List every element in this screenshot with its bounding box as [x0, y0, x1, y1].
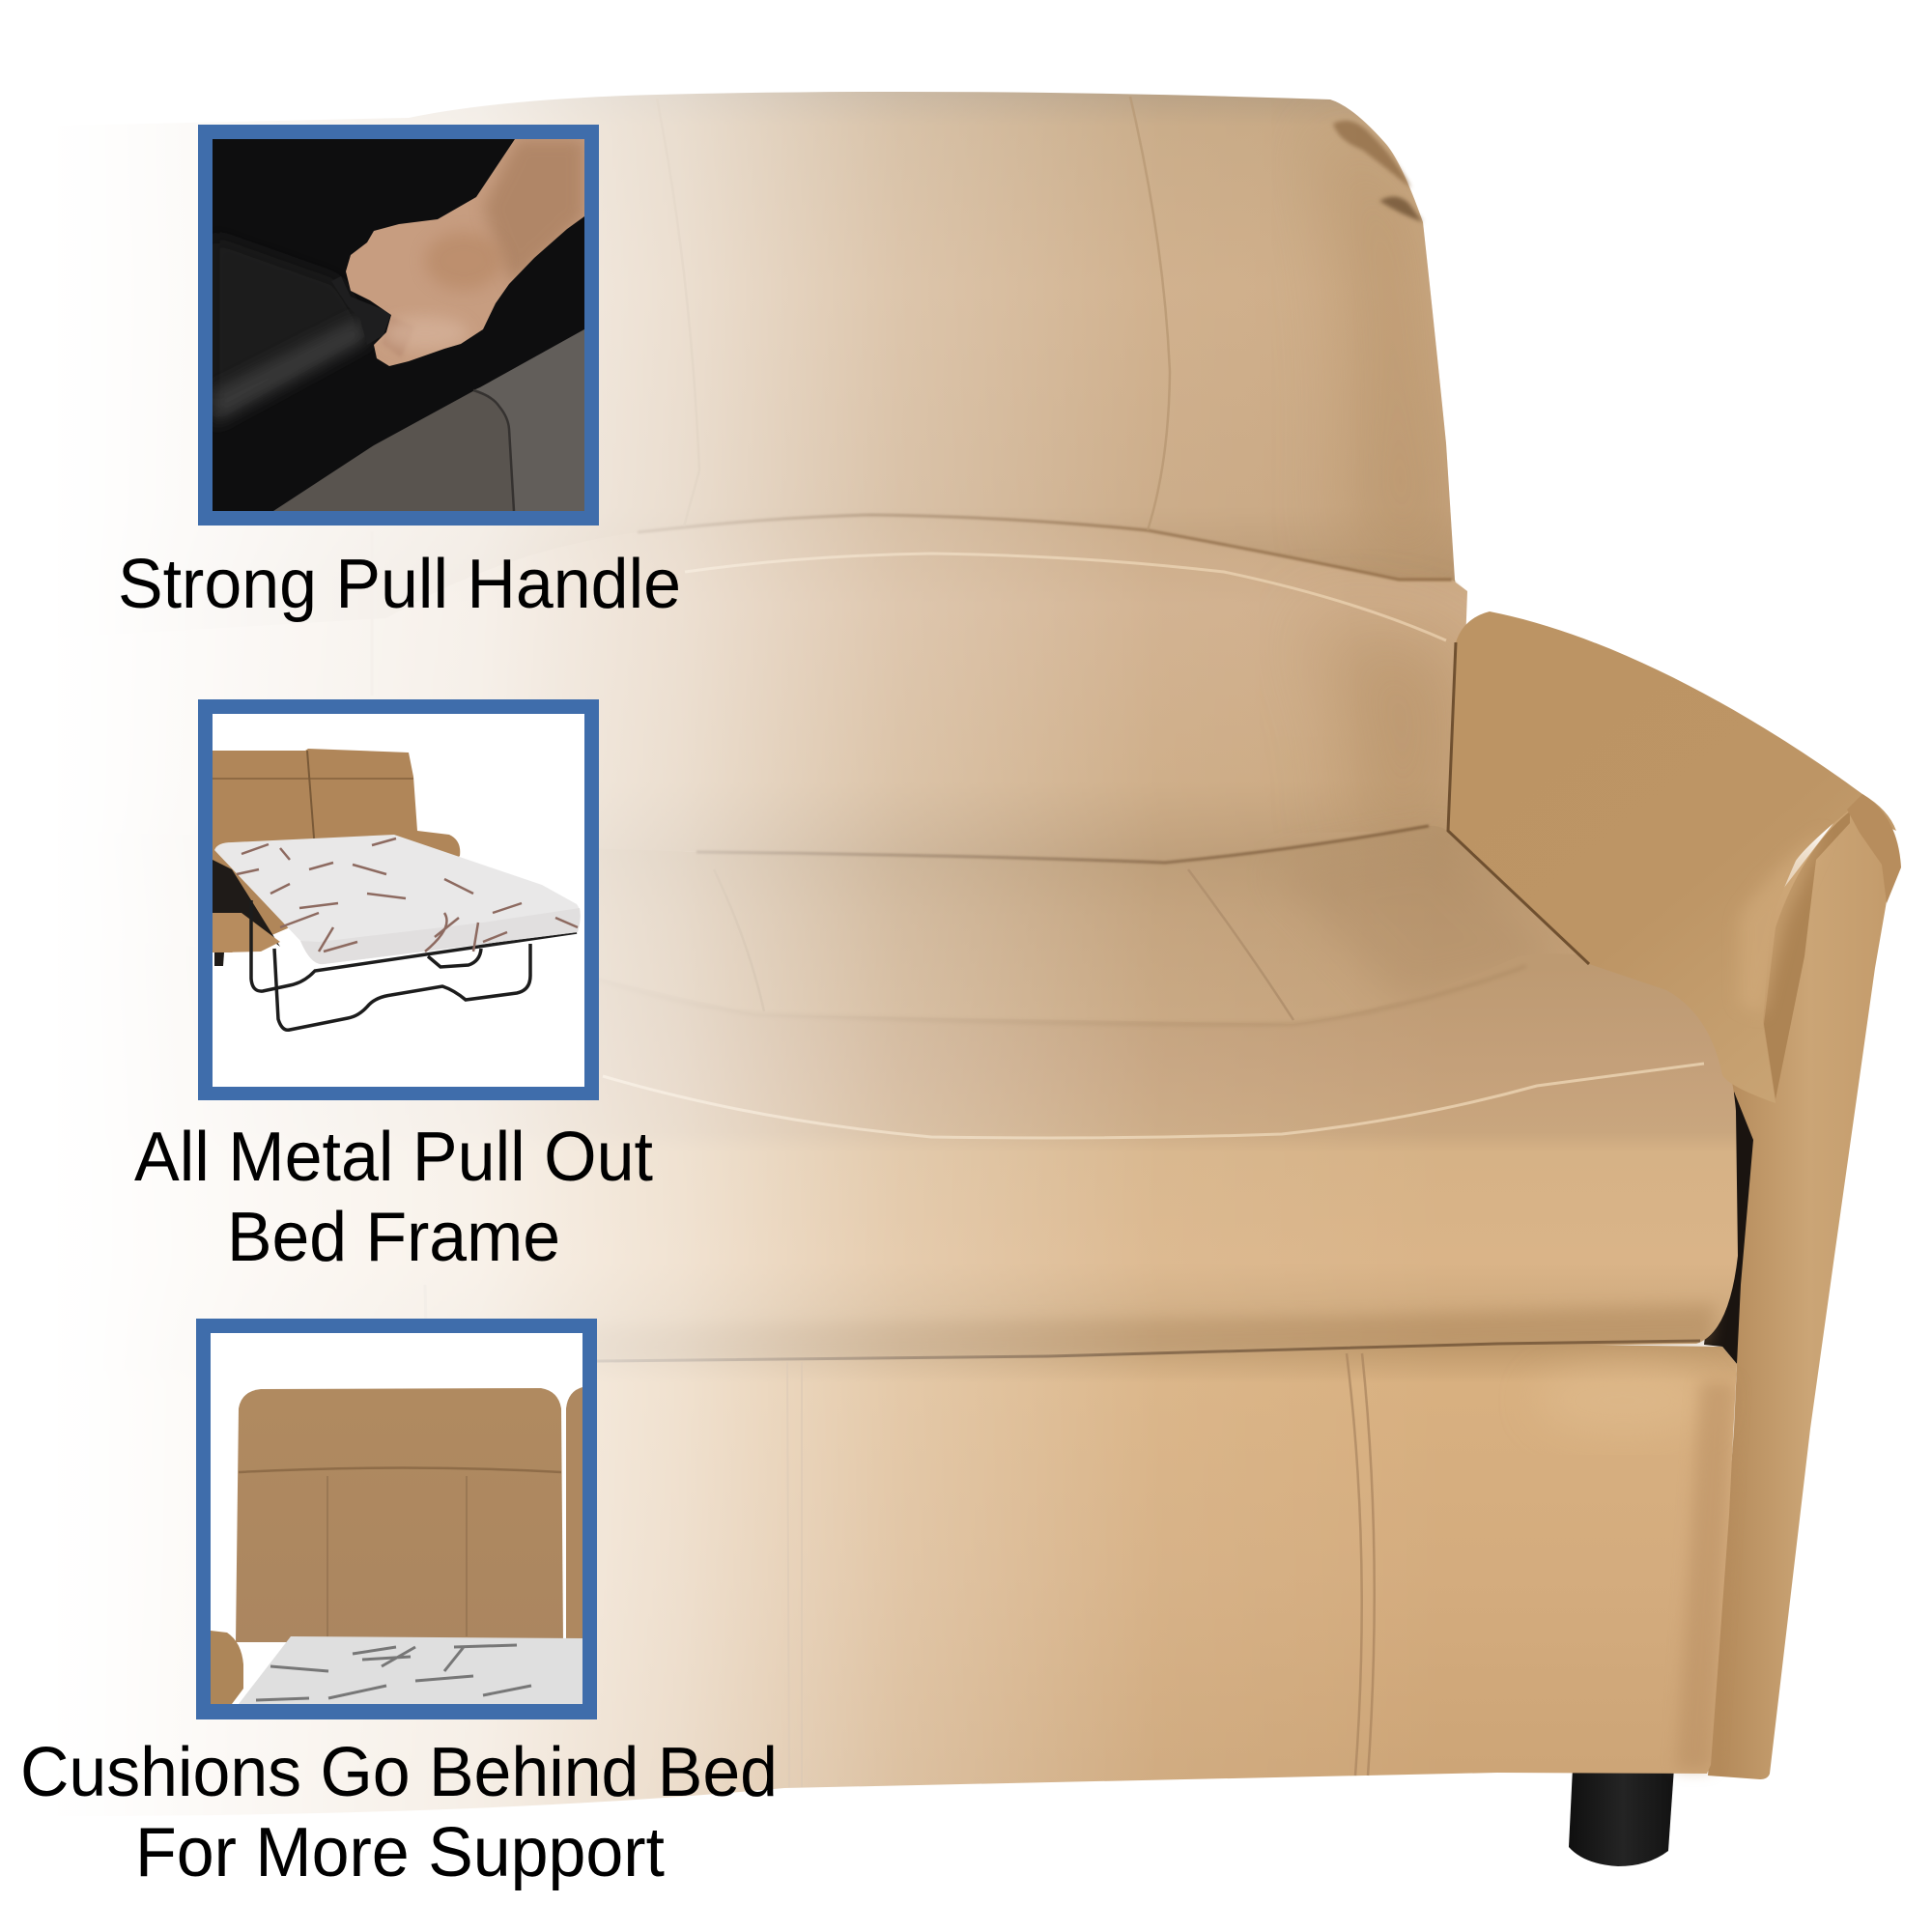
arm roll inner fold — [1764, 811, 1850, 1099]
photo: hand pulling handle — [213, 139, 584, 511]
arm cap — [1847, 794, 1901, 903]
sofa arm front post — [1708, 802, 1899, 1779]
sofa front panel — [58, 1344, 1737, 1816]
frame — [196, 1319, 597, 1719]
seat fold shadow — [696, 826, 1429, 863]
caption: cushions go behind bed: Cushions Go Behind Bed — [20, 1734, 778, 1811]
gap behind cushion — [1704, 1092, 1753, 1364]
sofa arm roll — [1448, 611, 1896, 1103]
upper back right shading — [1314, 126, 1454, 580]
panel: cushions go behind bed — [196, 1319, 597, 1719]
back wrinkles — [1333, 121, 1423, 222]
sofa foot — [1569, 1768, 1674, 1866]
caption: cushions go behind bed: For More Support — [135, 1814, 665, 1891]
cushion and panel gap — [597, 1341, 1700, 1361]
photo: pull out bed — [213, 714, 584, 1087]
caption: strong pull handle: Strong Pull Handle — [118, 546, 681, 623]
frame — [198, 699, 599, 1100]
arm dark line — [1448, 642, 1589, 964]
arm roll highlight — [1739, 831, 1826, 1014]
sofa cushion front — [58, 937, 1738, 1372]
upper and lower back shadow line — [638, 515, 1452, 580]
lower back right shading — [1323, 613, 1453, 827]
cushion bottom shadow — [483, 1304, 1715, 1367]
caption: cushions go behind bed — [20, 1734, 778, 1891]
seat right darkening — [1275, 840, 1565, 1005]
white fade overlay — [0, 0, 1449, 1932]
sofa upper back — [58, 92, 1467, 676]
seams and stitching — [372, 97, 1704, 1787]
caption: metal pull out bed frame: Bed Frame — [227, 1199, 560, 1276]
sofa lower back cushion — [58, 515, 1467, 863]
cushion front crease — [580, 966, 1526, 1024]
sofa seat top — [58, 826, 1598, 1063]
caption: metal pull out bed frame: All Metal Pull Out — [134, 1119, 653, 1196]
caption: metal pull out bed frame — [134, 1119, 653, 1276]
photo: cushion behind mattress — [211, 1333, 582, 1704]
frame — [198, 125, 599, 526]
panel: strong pull handle — [198, 125, 599, 526]
panel: metal pull out bed frame — [198, 699, 599, 1100]
front panel right shading — [1676, 1381, 1736, 1770]
front panel right highlight — [1536, 1367, 1710, 1435]
